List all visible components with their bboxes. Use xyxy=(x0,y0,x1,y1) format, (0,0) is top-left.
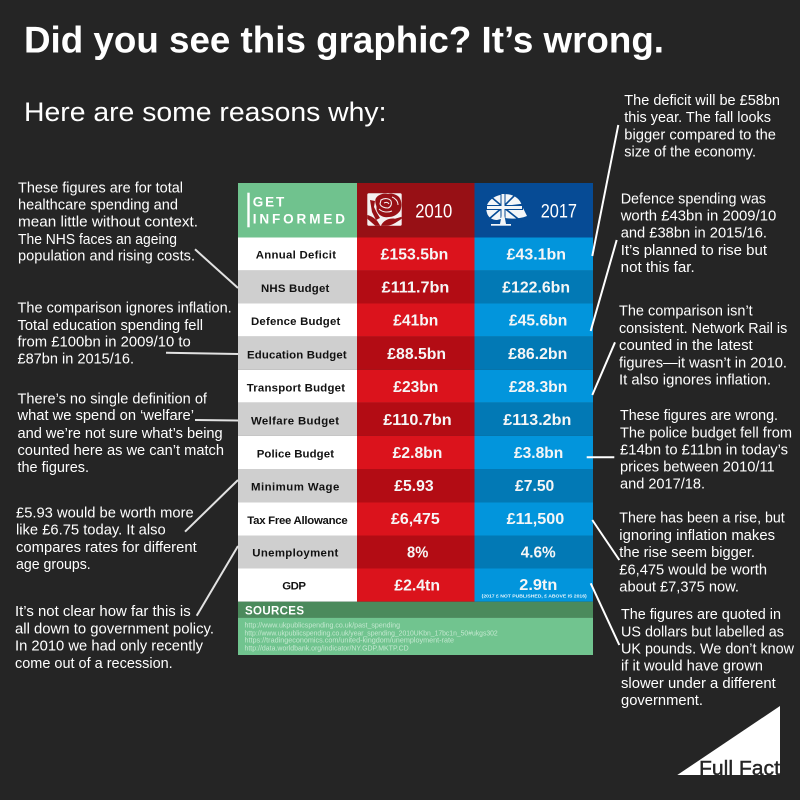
note: education spending: The comparison ignores inflation. xyxy=(18,299,232,316)
table row: Police Budget: £2.8bn xyxy=(393,445,442,462)
note: defence: not this far. xyxy=(621,259,695,276)
note: GDP: if it would have grown xyxy=(621,658,763,675)
table row: Education Budget: Education Budget xyxy=(247,349,347,361)
table row: Tax Free Allowance: £6,475 xyxy=(391,511,440,528)
note: minimum wage: like £6.75 today. It also xyxy=(16,522,166,539)
note: unemployment: all down to government policy. xyxy=(15,621,214,638)
table row: Minimum Wage: £5.93 xyxy=(394,478,434,495)
table row: Annual Deficit: £153.5bn xyxy=(381,246,448,263)
table header row: 2017 xyxy=(541,202,577,223)
table row: Transport Budget: £23bn xyxy=(393,379,438,396)
table row: NHS Budget: NHS Budget xyxy=(261,283,330,295)
note: welfare definition: the figures. xyxy=(18,459,89,476)
table row: Tax Free Allowance: Tax Free Allowance xyxy=(247,515,348,527)
table row: Welfare Budget xyxy=(238,403,593,436)
note: tax free allowance: the rise seem bigger. xyxy=(619,544,755,561)
table row: Tax Free Allowance xyxy=(238,502,593,536)
note: GDP: slower under a different xyxy=(621,675,777,692)
note: transport: It also ignores inflation. xyxy=(619,372,771,389)
table row: Police Budget xyxy=(238,436,593,469)
icon: Labour rose xyxy=(367,193,402,226)
table row: Unemployment xyxy=(238,536,593,568)
arrow: minimum wage note to Minimum Wage row xyxy=(185,480,238,532)
note: welfare definition: and we’re not sure what’s being xyxy=(18,425,223,442)
arrow: welfare note to Welfare Budget row xyxy=(195,419,238,422)
arrow: deficit note to Annual Deficit row xyxy=(592,125,618,256)
sources block: http://www.ukpublicspending.co.uk/past_spending xyxy=(244,621,400,630)
table row: GDP: £2.4tn xyxy=(394,578,440,595)
sources block: http://www.ukpublicspending.co.uk/year_spending_2010UKbn_17bc1n_50#ukgs302 xyxy=(244,628,498,637)
note: tax free allowance: £6,475 would be worth xyxy=(619,561,767,578)
note: GDP xyxy=(621,606,794,709)
table row: Welfare Budget: £113.2bn xyxy=(503,412,571,429)
note: minimum wage: compares rates for different xyxy=(16,539,198,556)
table row: Defence Budget: £41bn xyxy=(393,313,438,330)
table row: Transport Budget: £28.3bn xyxy=(509,379,567,396)
note: welfare definition xyxy=(17,390,224,476)
table row: GDP xyxy=(238,568,593,602)
table row: NHS Budget xyxy=(238,271,593,304)
note: unemployment: come out of a recession. xyxy=(15,655,173,672)
table row: Transport Budget: Transport Budget xyxy=(247,382,345,394)
note: healthcare spending: healthcare spending and xyxy=(18,196,178,214)
note: transport: counted in the latest xyxy=(619,337,754,354)
table row: Tax Free Allowance: £11,500 xyxy=(507,511,564,528)
note: healthcare spending: mean little without context. xyxy=(18,214,198,230)
table row: Unemployment: 8% xyxy=(407,545,429,562)
title: Did you see this graphic? It’s wrong. xyxy=(24,20,664,60)
note: defence: and £38bn in 2015/16. xyxy=(621,225,767,242)
note: GDP: UK pounds. We don’t know xyxy=(621,640,794,657)
sources block xyxy=(238,602,593,655)
table row: GDP: 2.9tn xyxy=(519,577,557,594)
note: police: prices between 2010/11 xyxy=(620,459,775,476)
note: transport: The comparison isn’t xyxy=(619,303,753,320)
arrow: defence note to Defence Budget row xyxy=(591,240,617,331)
table row: GDP: GDP xyxy=(282,581,306,593)
note: transport: figures—it wasn’t in 2010. xyxy=(619,354,787,371)
note: healthcare spending: These figures are for total xyxy=(18,179,183,196)
table row: Defence Budget xyxy=(238,304,593,337)
table row: NHS Budget: £111.7bn xyxy=(382,280,449,297)
note: tax free allowance: about £7,375 now. xyxy=(619,579,739,596)
arrow: healthcare note to NHS Budget row xyxy=(195,249,238,288)
note: police xyxy=(620,407,792,493)
table row: Annual Deficit: Annual Deficit xyxy=(256,250,336,262)
note: unemployment: In 2010 we had only recently xyxy=(15,638,203,655)
note: education spending: Total education spending fell xyxy=(18,317,203,334)
table row: Minimum Wage: Minimum Wage xyxy=(251,482,339,494)
note: transport: consistent. Network Rail is xyxy=(619,320,787,337)
table row: Annual Deficit: £43.1bn xyxy=(507,246,566,263)
table row: Minimum Wage xyxy=(238,469,593,502)
note: deficit: The deficit will be £58bn xyxy=(624,92,780,109)
note: defence: Defence spending was xyxy=(621,190,766,207)
panel: comparison table xyxy=(238,183,593,655)
note: unemployment: It’s not clear how far this is xyxy=(15,603,191,620)
note: education spending xyxy=(18,299,232,368)
table header row: 2010 xyxy=(415,202,452,223)
note: education spending: £87bn in 2015/16. xyxy=(18,351,134,368)
table row: Education Budget xyxy=(238,337,593,370)
note: healthcare spending: population and rising costs. xyxy=(18,248,195,265)
note: welfare definition: There’s no single definition of xyxy=(18,390,208,407)
table row: GDP: (2017 £ NOT PUBLISHED, £ ABOVE IS 2016) xyxy=(482,593,587,598)
arrow: transport note to Transport Budget row xyxy=(592,342,615,395)
note: deficit: this year. The fall looks xyxy=(624,109,771,126)
note: welfare definition: counted here as we can’t match xyxy=(18,442,224,459)
arrow: GDP note to GDP row xyxy=(591,583,619,645)
table row: Transport Budget xyxy=(238,370,593,403)
table row: Minimum Wage: £7.50 xyxy=(515,478,554,495)
note: unemployment xyxy=(15,603,214,672)
table row: Police Budget: £3.8bn xyxy=(514,445,563,462)
table row: Unemployment: Unemployment xyxy=(252,548,339,560)
note: GDP: The figures are quoted in xyxy=(621,606,781,623)
table header row: GET xyxy=(253,195,285,210)
note: deficit: size of the economy. xyxy=(624,144,756,161)
sources block: http://data.worldbank.org/indicator/NY.GDP.MKTP.CD xyxy=(244,643,409,652)
note: education spending: from £100bn in 2009/10 to xyxy=(18,333,191,350)
note: tax free allowance: There has been a rise, but xyxy=(619,509,785,526)
table row: Welfare Budget: Welfare Budget xyxy=(251,415,339,427)
table row: Police Budget: Police Budget xyxy=(257,449,334,461)
note: GDP: government. xyxy=(621,692,703,709)
table header row: INFORMED xyxy=(253,211,345,226)
arrow: police note to Police Budget row xyxy=(587,456,614,458)
arrow: allowance note to Tax Free Allowance row xyxy=(592,520,619,560)
note: minimum wage: age groups. xyxy=(16,556,91,573)
sources block: SOURCES xyxy=(245,606,304,618)
note: police: These figures are wrong. xyxy=(620,407,778,424)
note: police: and 2017/18. xyxy=(620,476,705,493)
note: police: £14bn to £11bn in today’s xyxy=(620,441,788,458)
note: healthcare spending xyxy=(18,179,198,265)
arrow: education note to Education Budget row xyxy=(166,353,238,354)
note: welfare definition: what we spend on ‘welfare’ xyxy=(17,407,194,424)
table row: Welfare Budget: £110.7bn xyxy=(383,412,452,429)
note: tax free allowance xyxy=(619,509,785,596)
table row: Defence Budget: Defence Budget xyxy=(251,316,341,328)
table row: Unemployment: 4.6% xyxy=(521,545,556,562)
note: defence: It’s planned to rise but xyxy=(621,242,768,259)
sources block: https://tradingeconomics.com/united-kingdom/unemployment-rate xyxy=(244,636,454,645)
table row: Defence Budget: £45.6bn xyxy=(509,313,567,330)
table row: Annual Deficit xyxy=(238,238,593,271)
icon: Conservative tree xyxy=(486,193,527,226)
note: police: The police budget fell from xyxy=(620,424,792,441)
note: tax free allowance: ignoring inflation makes xyxy=(619,527,775,544)
table row: Education Budget: £88.5bn xyxy=(387,346,446,363)
note: minimum wage xyxy=(16,504,198,573)
table row: Education Budget: £86.2bn xyxy=(508,346,567,363)
note: deficit xyxy=(624,92,780,161)
subtitle: Here are some reasons why: xyxy=(24,97,386,127)
note: defence xyxy=(620,190,776,276)
note: transport xyxy=(619,303,787,389)
note: defence: worth £43bn in 2009/10 xyxy=(620,208,776,225)
note: deficit: bigger compared to the xyxy=(624,127,776,144)
logo: Full Fact xyxy=(677,706,780,780)
note: healthcare spending: The NHS faces an ageing xyxy=(18,231,177,248)
table row: NHS Budget: £122.6bn xyxy=(502,280,570,297)
logo: Full Fact: Full Fact xyxy=(699,757,780,780)
note: GDP: US dollars but labelled as xyxy=(621,623,784,640)
note: minimum wage: £5.93 would be worth more xyxy=(16,504,194,521)
arrow: unemployment note to Unemployment row xyxy=(197,546,238,616)
table header row xyxy=(238,183,593,238)
